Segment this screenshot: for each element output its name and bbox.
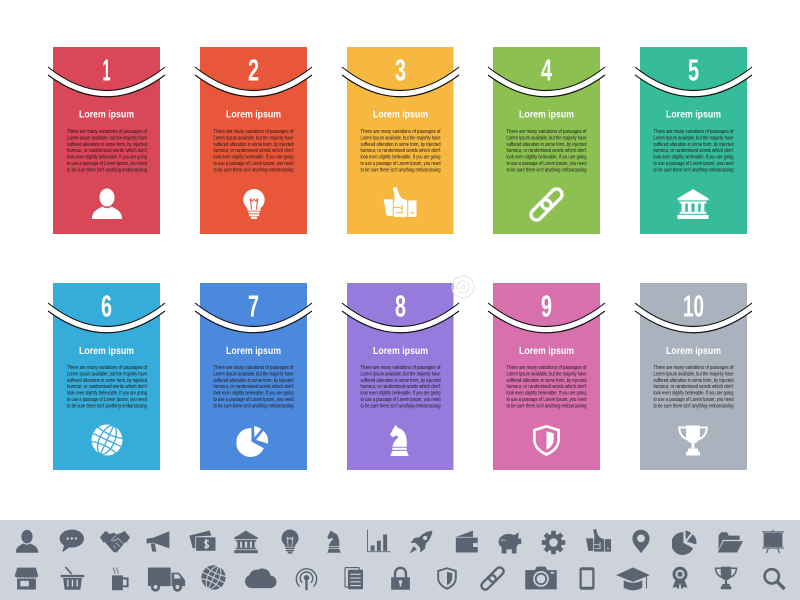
body text: to be sure there isn't anything embarrassing [214, 403, 294, 409]
icon: person [16, 530, 38, 553]
body text: There are many variations of passages of [360, 129, 441, 135]
body text: to use a passage of Lorem Ipsum, you need [506, 397, 587, 403]
body text [360, 129, 441, 173]
body text: There are many variations of passages of [506, 129, 587, 135]
heading: Lorem ipsum [666, 108, 721, 120]
number: 7 [248, 288, 259, 324]
icon: antenna [296, 569, 317, 590]
body text: to be sure there isn't anything embarrassing [360, 167, 441, 173]
watermark [452, 276, 474, 298]
icon: globe [197, 561, 230, 594]
body text: humour, or randomised words which don't [654, 148, 734, 154]
icon: money [189, 531, 216, 551]
heading: Lorem ipsum [79, 345, 134, 357]
ribbon [48, 67, 165, 97]
body text: to use a passage of Lorem Ipsum, you need [360, 397, 441, 403]
heading: Lorem ipsum [666, 345, 721, 357]
icon: thumbs up [586, 529, 611, 552]
ribbon [342, 303, 459, 333]
body text: look even slightly believable. If you are going [506, 391, 587, 397]
body text: Lorem Ipsum available, but the majority have [360, 371, 441, 377]
body text [506, 129, 587, 173]
body text: humour, or randomised words which don't [214, 384, 294, 390]
body text [67, 129, 147, 173]
icon: presentation board [762, 530, 784, 553]
body text: Lorem Ipsum available, but the majority have [360, 135, 441, 141]
body text: suffered alteration in some form, by injected [506, 142, 587, 148]
body text: humour, or randomised words which don't [67, 148, 147, 154]
ribbon [342, 67, 459, 97]
icon: bar chart [368, 530, 390, 552]
icon: globe [86, 419, 128, 461]
icon: light bulb [243, 189, 265, 219]
icon: truck [148, 568, 185, 592]
body text: to use a passage of Lorem Ipsum, you need [67, 397, 147, 403]
icon: chat bubble [60, 530, 84, 552]
body text: There are many variations of passages of [654, 129, 734, 135]
icon strip [0, 520, 800, 600]
body text: humour, or randomised words which don't [214, 148, 294, 154]
body text: to use a passage of Lorem Ipsum, you need [506, 161, 587, 167]
body text: There are many variations of passages of [214, 365, 294, 371]
ribbon [635, 303, 752, 333]
icon: shield [533, 425, 560, 456]
body text: Lorem Ipsum available, but the majority have [506, 371, 587, 377]
icon: coffee mug [112, 568, 128, 590]
body text: to be sure there isn't anything embarrassing [654, 403, 734, 409]
icon: basket [61, 567, 84, 590]
icon: cloud [245, 568, 276, 588]
icon: rocket [410, 531, 432, 553]
body text: Lorem Ipsum available, but the majority have [506, 135, 587, 141]
body text [360, 365, 441, 409]
card 8 [342, 283, 459, 470]
body text [67, 365, 147, 409]
icon: award ribbon [672, 567, 688, 589]
body text: look even slightly believable. If you are going [360, 155, 441, 161]
body text: suffered alteration in some form, by injected [654, 378, 734, 384]
heading: Lorem ipsum [79, 108, 134, 120]
body text: to be sure there isn't anything embarrassing [654, 167, 734, 173]
body text: suffered alteration in some form, by injected [360, 378, 441, 384]
body text: suffered alteration in some form, by injected [67, 142, 147, 148]
body text: suffered alteration in some form, by injected [360, 142, 441, 148]
number: 2 [248, 52, 259, 88]
icon: lock [391, 568, 410, 590]
body text: humour, or randomised words which don't [360, 148, 441, 154]
icon: wallet [456, 531, 478, 552]
body text [654, 365, 734, 409]
number: 4 [541, 52, 552, 88]
body text: suffered alteration in some form, by injected [506, 378, 587, 384]
body text: humour, or randomised words which don't [360, 384, 441, 390]
body text: There are many variations of passages of [654, 365, 734, 371]
body text: There are many variations of passages of [214, 129, 294, 135]
icon: piggy bank [499, 532, 521, 553]
number: 5 [688, 52, 699, 88]
card 10 [635, 283, 752, 470]
card 2 [195, 47, 312, 234]
icon: person [92, 188, 122, 219]
body text: to use a passage of Lorem Ipsum, you need [654, 397, 734, 403]
heading: Lorem ipsum [373, 108, 428, 120]
number: 6 [101, 288, 112, 324]
body text: suffered alteration in some form, by injected [654, 142, 734, 148]
ribbon [488, 303, 605, 333]
card 1 [48, 47, 165, 234]
icon: smartphone [580, 567, 594, 590]
card 1: 1 [102, 52, 110, 88]
icon: light bulb [281, 530, 299, 554]
number: 9 [541, 288, 552, 324]
icon: pie chart [236, 426, 268, 457]
body text: There are many variations of passages of [506, 365, 587, 371]
body text: to be sure there isn't anything embarrassing [214, 167, 294, 173]
icon: trophy [716, 567, 736, 589]
body text: look even slightly believable. If you are going [67, 391, 147, 397]
icon: handshake [100, 531, 130, 552]
card 9 [488, 283, 605, 470]
body text: Lorem Ipsum available, but the majority have [214, 371, 294, 377]
body text: to be sure there isn't anything embarrassing [506, 167, 587, 173]
card 4 [488, 47, 605, 234]
ribbon [195, 303, 312, 333]
body text: look even slightly believable. If you are going [654, 391, 734, 397]
icon: map pin [632, 530, 650, 553]
icon: bank [678, 189, 708, 219]
icon: camera [525, 567, 557, 589]
body text: suffered alteration in some form, by injected [214, 142, 294, 148]
card 5 [635, 47, 752, 234]
icon: bank [234, 531, 258, 553]
body text [654, 129, 734, 173]
icon: shield [437, 567, 457, 590]
heading: Lorem ipsum [373, 345, 428, 357]
body text: Lorem Ipsum available, but the majority have [654, 135, 734, 141]
icon: chess knight [390, 425, 409, 456]
heading: Lorem ipsum [519, 345, 574, 357]
ribbon [195, 67, 312, 97]
heading: Lorem ipsum [226, 345, 281, 357]
body text: to be sure there isn't anything embarrassing [360, 403, 441, 409]
icon: shop [15, 568, 38, 589]
icon: chain link [480, 566, 505, 591]
body text: There are many variations of passages of [67, 365, 147, 371]
body text: to use a passage of Lorem Ipsum, you need [67, 161, 147, 167]
body text: look even slightly believable. If you are going [214, 155, 294, 161]
body text: Lorem Ipsum available, but the majority have [67, 371, 147, 377]
body text: Lorem Ipsum available, but the majority have [654, 371, 734, 377]
icon: chain link [529, 187, 564, 222]
body text: There are many variations of passages of [360, 365, 441, 371]
body text: to use a passage of Lorem Ipsum, you need [214, 397, 294, 403]
body text: look even slightly believable. If you are going [654, 155, 734, 161]
body text: look even slightly believable. If you are going [506, 155, 587, 161]
icon: magnifier [765, 569, 784, 589]
body text: look even slightly believable. If you are going [360, 391, 441, 397]
body text: Lorem Ipsum available, but the majority have [214, 135, 294, 141]
icon: pie chart [671, 531, 697, 555]
body text: to use a passage of Lorem Ipsum, you need [360, 161, 441, 167]
body text: to be sure there isn't anything embarrassing [506, 403, 587, 409]
ribbon [488, 67, 605, 97]
body text: look even slightly believable. If you are going [67, 155, 147, 161]
body text: Lorem Ipsum available, but the majority have [67, 135, 147, 141]
body text: look even slightly believable. If you are going [214, 391, 294, 397]
body text: humour, or randomised words which don't [654, 384, 734, 390]
icon: thumbs up [384, 187, 416, 217]
number: 10 [683, 288, 704, 324]
card 6 [48, 283, 165, 470]
icon: documents [345, 568, 363, 589]
body text: to use a passage of Lorem Ipsum, you need [214, 161, 294, 167]
heading: Lorem ipsum [519, 108, 574, 120]
number: 3 [395, 52, 406, 88]
icon: megaphone [147, 531, 169, 552]
ribbon [48, 303, 165, 333]
body text: to be sure there isn't anything embarrassing [67, 403, 147, 409]
heading: Lorem ipsum [226, 108, 281, 120]
body text: suffered alteration in some form, by injected [214, 378, 294, 384]
icon: folder [718, 532, 743, 552]
body text: suffered alteration in some form, by injected [67, 378, 147, 384]
body text: humour, or randomised words which don't [506, 148, 587, 154]
ribbon [635, 67, 752, 97]
body text [214, 365, 294, 409]
body text [214, 129, 294, 173]
card 3 [342, 47, 459, 234]
body text [506, 365, 587, 409]
body text: to be sure there isn't anything embarrassing [67, 167, 147, 173]
icon: trophy [679, 426, 707, 456]
icon: chess knight [327, 530, 341, 553]
body text: humour, or randomised words which don't [67, 384, 147, 390]
icon: graduation cap [616, 568, 650, 590]
body text: There are many variations of passages of [67, 129, 147, 135]
number: 8 [395, 288, 406, 324]
body text: to use a passage of Lorem Ipsum, you need [654, 161, 734, 167]
body text: humour, or randomised words which don't [506, 384, 587, 390]
card 7 [195, 283, 312, 470]
icon: gear [542, 531, 565, 554]
